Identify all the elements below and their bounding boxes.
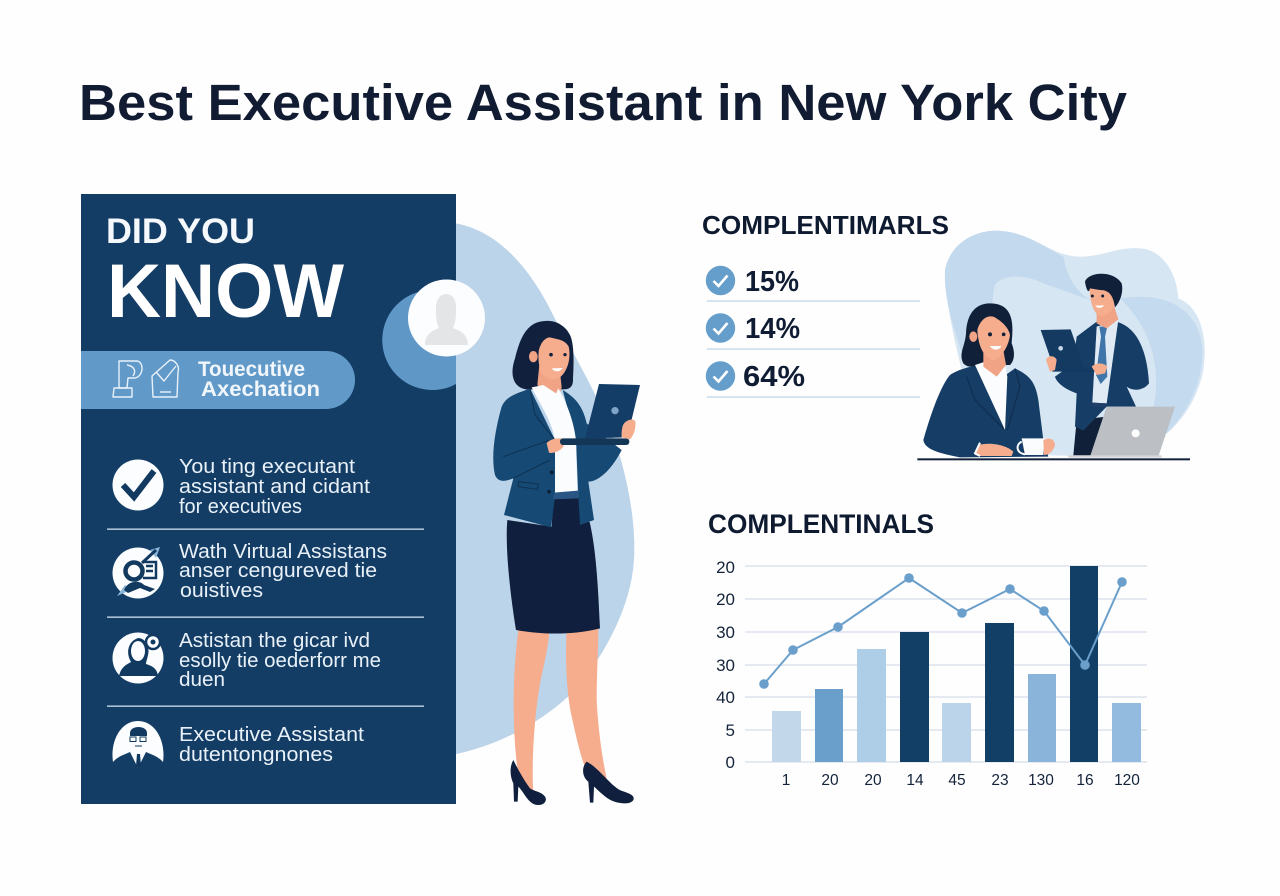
- illustration: two colleagues: [917, 231, 1205, 460]
- x axis labels: 23: [991, 772, 1009, 789]
- x axis labels: 20: [864, 772, 882, 789]
- icon: banner check envelope: [152, 360, 178, 397]
- row 2 text: [179, 541, 387, 602]
- combo chart: [716, 558, 1147, 789]
- grey laptop: [1068, 407, 1175, 458]
- y axis labels: 30: [716, 623, 735, 642]
- stats heading: COMPLENTIMARLS: [702, 210, 949, 240]
- y axis labels: 0: [726, 753, 735, 772]
- row 2: [112, 541, 387, 602]
- stat 15%: 15%: [745, 266, 799, 298]
- neck: [537, 365, 562, 403]
- banner text: Axechation: [201, 378, 320, 401]
- icon: banner document: [113, 361, 142, 397]
- stats list: [706, 266, 920, 398]
- stat 15%: [706, 266, 799, 298]
- line series: [759, 573, 1127, 689]
- legs: [514, 628, 610, 793]
- icon: magnifier and chart: [112, 547, 164, 598]
- row 1 text: [179, 456, 370, 518]
- hair back: [512, 321, 574, 389]
- banner pill: [81, 351, 355, 409]
- row 2 text: ouistives: [180, 580, 263, 602]
- bars: [772, 566, 1141, 762]
- y axis labels: 20: [716, 590, 735, 609]
- row 3 text: esolly tie oederforr me: [179, 650, 381, 672]
- row 2 text: Wath Virtual Assistans: [179, 541, 387, 563]
- row 1 text: You ting executant: [179, 456, 355, 478]
- face details: [549, 353, 567, 371]
- row 4 text: dutentongnones: [179, 744, 333, 766]
- row 3 text: duen: [179, 669, 225, 691]
- man: [1041, 274, 1149, 455]
- chart heading: COMPLENTINALS: [708, 509, 934, 539]
- blouse: [532, 385, 577, 493]
- background blobs: [945, 231, 1205, 457]
- row 1 text: for executives: [179, 496, 302, 518]
- title: Best Executive Assistant in New York City: [79, 74, 1128, 131]
- row 3: [112, 630, 381, 691]
- banner text: Touecutive: [198, 358, 305, 381]
- icon: avatar silhouette: [425, 294, 468, 345]
- x axis labels: 130: [1028, 772, 1054, 789]
- x axis labels: 16: [1076, 772, 1094, 789]
- jacket: [493, 388, 622, 527]
- y axis labels: 40: [716, 688, 735, 707]
- banner text: [198, 358, 320, 401]
- avatar badge: [382, 280, 485, 390]
- x axis labels: 20: [821, 772, 839, 789]
- stat 64%: [706, 361, 805, 393]
- x axis labels: [782, 772, 1140, 789]
- panel: did you know: [81, 194, 456, 804]
- heading: know: KNOW: [107, 249, 344, 334]
- seated woman: [923, 303, 1055, 457]
- x axis labels: 45: [948, 772, 966, 789]
- icon: check: [112, 460, 164, 510]
- icon: executive portrait: [112, 721, 164, 768]
- stat 14%: [706, 313, 800, 345]
- row 4: [112, 721, 364, 768]
- table line: [917, 458, 1190, 460]
- hand right: [622, 420, 635, 439]
- illustration: standing woman with laptop: [493, 321, 640, 805]
- icon: person with badge: [112, 632, 164, 684]
- row 4 text: Executive Assistant: [179, 724, 364, 746]
- face: [538, 337, 569, 379]
- x axis labels: 14: [906, 772, 924, 789]
- stat 14%: 14%: [745, 313, 800, 345]
- stat 64%: 64%: [743, 361, 805, 393]
- row 3 text: Astistan the gicar ivd: [179, 630, 370, 652]
- belt: [553, 491, 578, 499]
- row 1 text: assistant and cidant: [179, 476, 370, 498]
- decorative blob behind woman: [440, 222, 634, 757]
- x axis labels: 120: [1114, 772, 1140, 789]
- row 4 text: [179, 724, 364, 766]
- y axis labels: 20: [716, 558, 735, 577]
- x axis labels: 1: [782, 772, 790, 789]
- hand left: [547, 438, 565, 453]
- skirt: [507, 497, 600, 634]
- laptop: [560, 384, 640, 445]
- y axis labels: 30: [716, 656, 735, 675]
- heading: did you: DID YOU: [106, 212, 255, 251]
- y axis labels: 5: [726, 721, 735, 740]
- grid lines: [745, 566, 1147, 762]
- shoes: [511, 760, 634, 805]
- row 3 text: [179, 630, 381, 691]
- y axis labels: [716, 558, 735, 772]
- row 1: [112, 456, 370, 518]
- row 2 text: anser cengureved tie: [179, 560, 377, 582]
